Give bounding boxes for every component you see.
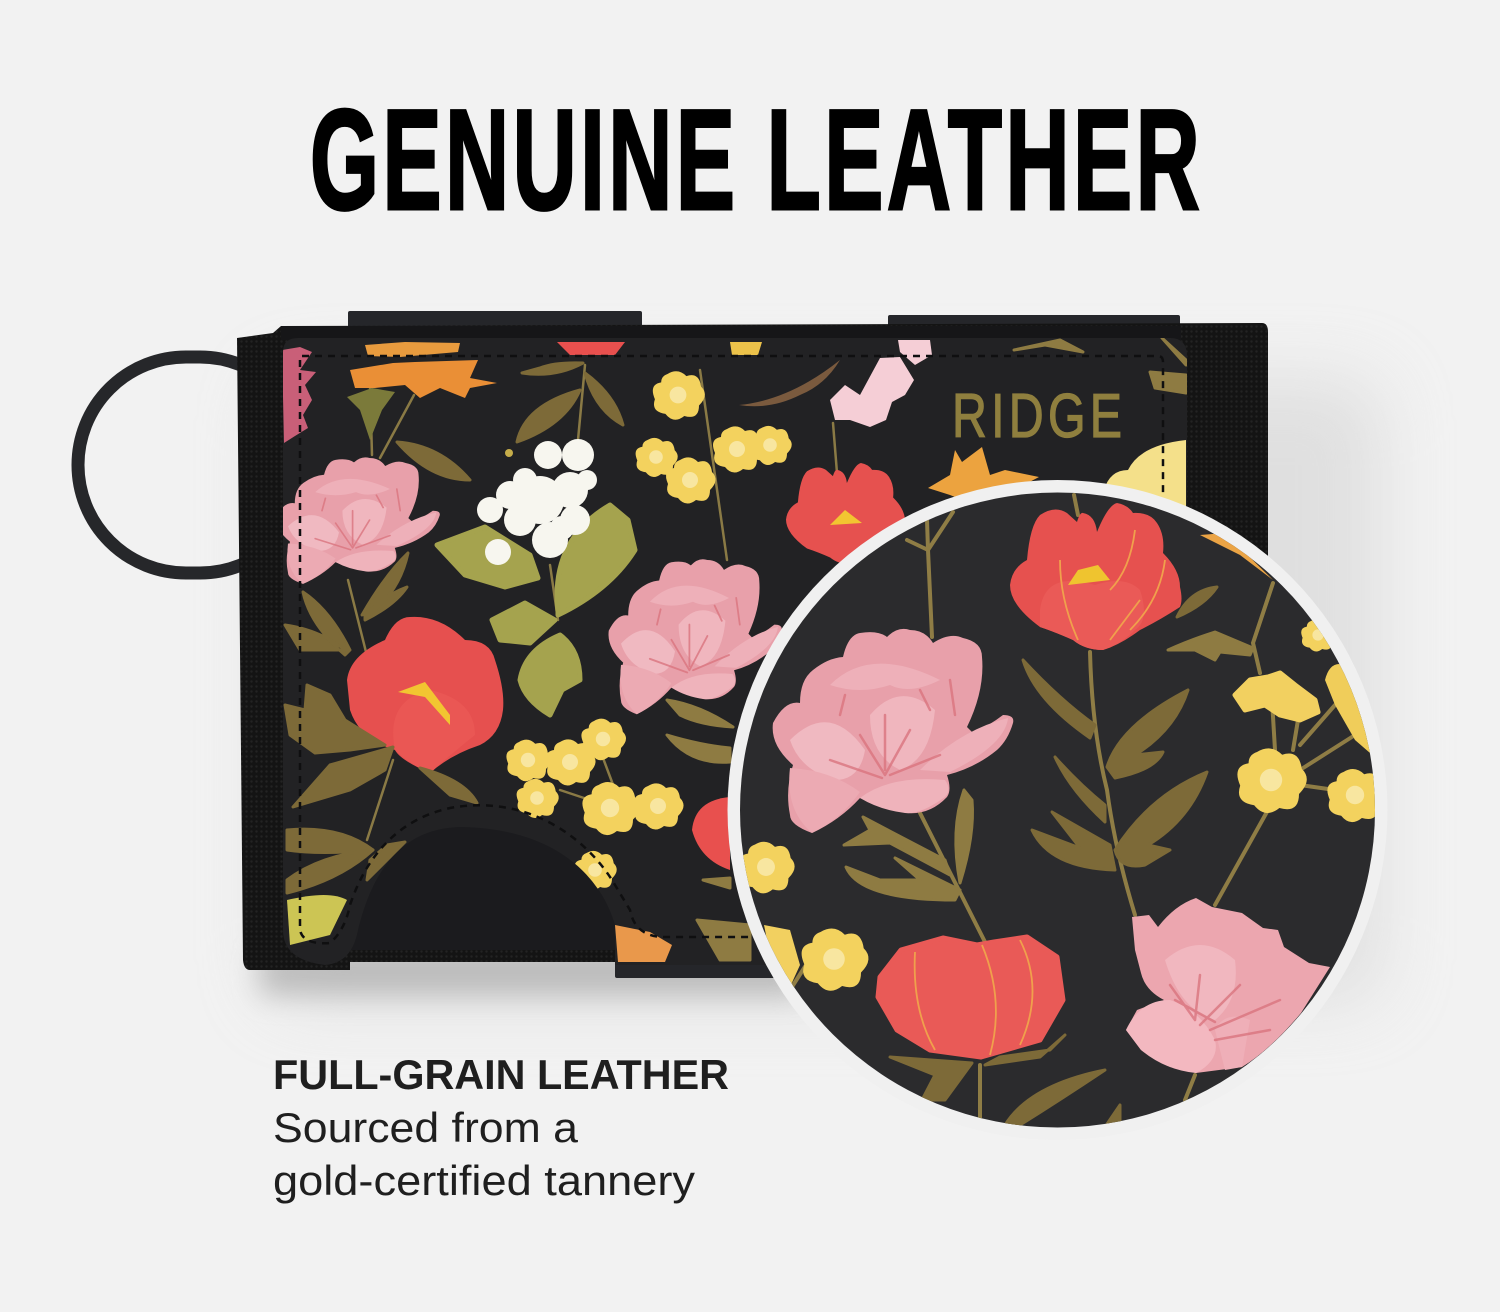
metal clips bbox=[348, 311, 1180, 978]
lens leaves bbox=[1023, 660, 1095, 738]
olive leaves bbox=[437, 527, 538, 587]
leather plate bbox=[283, 338, 1187, 965]
top right print bbox=[739, 360, 840, 406]
lens peony left bbox=[773, 629, 1013, 833]
lens bottom red flower bbox=[878, 937, 1063, 1057]
magnifier lens bbox=[739, 492, 1384, 1128]
left wallet peony bbox=[276, 457, 440, 584]
orange flowers top-left bbox=[365, 342, 460, 357]
magnifier ring bbox=[728, 480, 1388, 1140]
centre wallet peony bbox=[609, 559, 782, 714]
lens orange flower bbox=[1200, 533, 1273, 580]
stems bbox=[348, 365, 837, 840]
wallet tight shadow bbox=[260, 950, 800, 995]
lens peony right bbox=[1126, 898, 1330, 1073]
elastic band bbox=[237, 323, 1268, 970]
pink petals left edge bbox=[282, 347, 316, 443]
wallet bbox=[78, 311, 1268, 978]
infographic canvas bbox=[72, 108, 1386, 1204]
wallet yellow flowers top bbox=[653, 371, 705, 420]
caption heading: FULL-GRAIN LEATHER bbox=[273, 1051, 729, 1098]
wallet wide shadow bbox=[270, 380, 1380, 1000]
floral print bbox=[276, 338, 1186, 962]
white blossom cluster bbox=[477, 439, 597, 565]
wallet brown leaves bbox=[285, 685, 385, 753]
wallet big red flower bbox=[347, 617, 503, 773]
logo: RIDGE: RIDGE bbox=[952, 381, 1122, 450]
caption bbox=[273, 1051, 729, 1204]
wallet red flower bbox=[786, 463, 906, 564]
stitching bbox=[300, 356, 1163, 943]
icon: ring bbox=[78, 357, 308, 573]
back plate opening bbox=[350, 820, 620, 950]
top edge strip bbox=[281, 326, 1181, 340]
caption line 2: gold-certified tannery bbox=[273, 1157, 695, 1204]
lens top red flower bbox=[1010, 503, 1182, 650]
lower wallet print bbox=[667, 700, 733, 762]
title: GENUINE LEATHER bbox=[310, 80, 1200, 240]
lens yellow blossoms bbox=[1235, 673, 1318, 720]
lens stems bbox=[790, 495, 1355, 1127]
caption line 1: Sourced from a bbox=[273, 1104, 579, 1151]
